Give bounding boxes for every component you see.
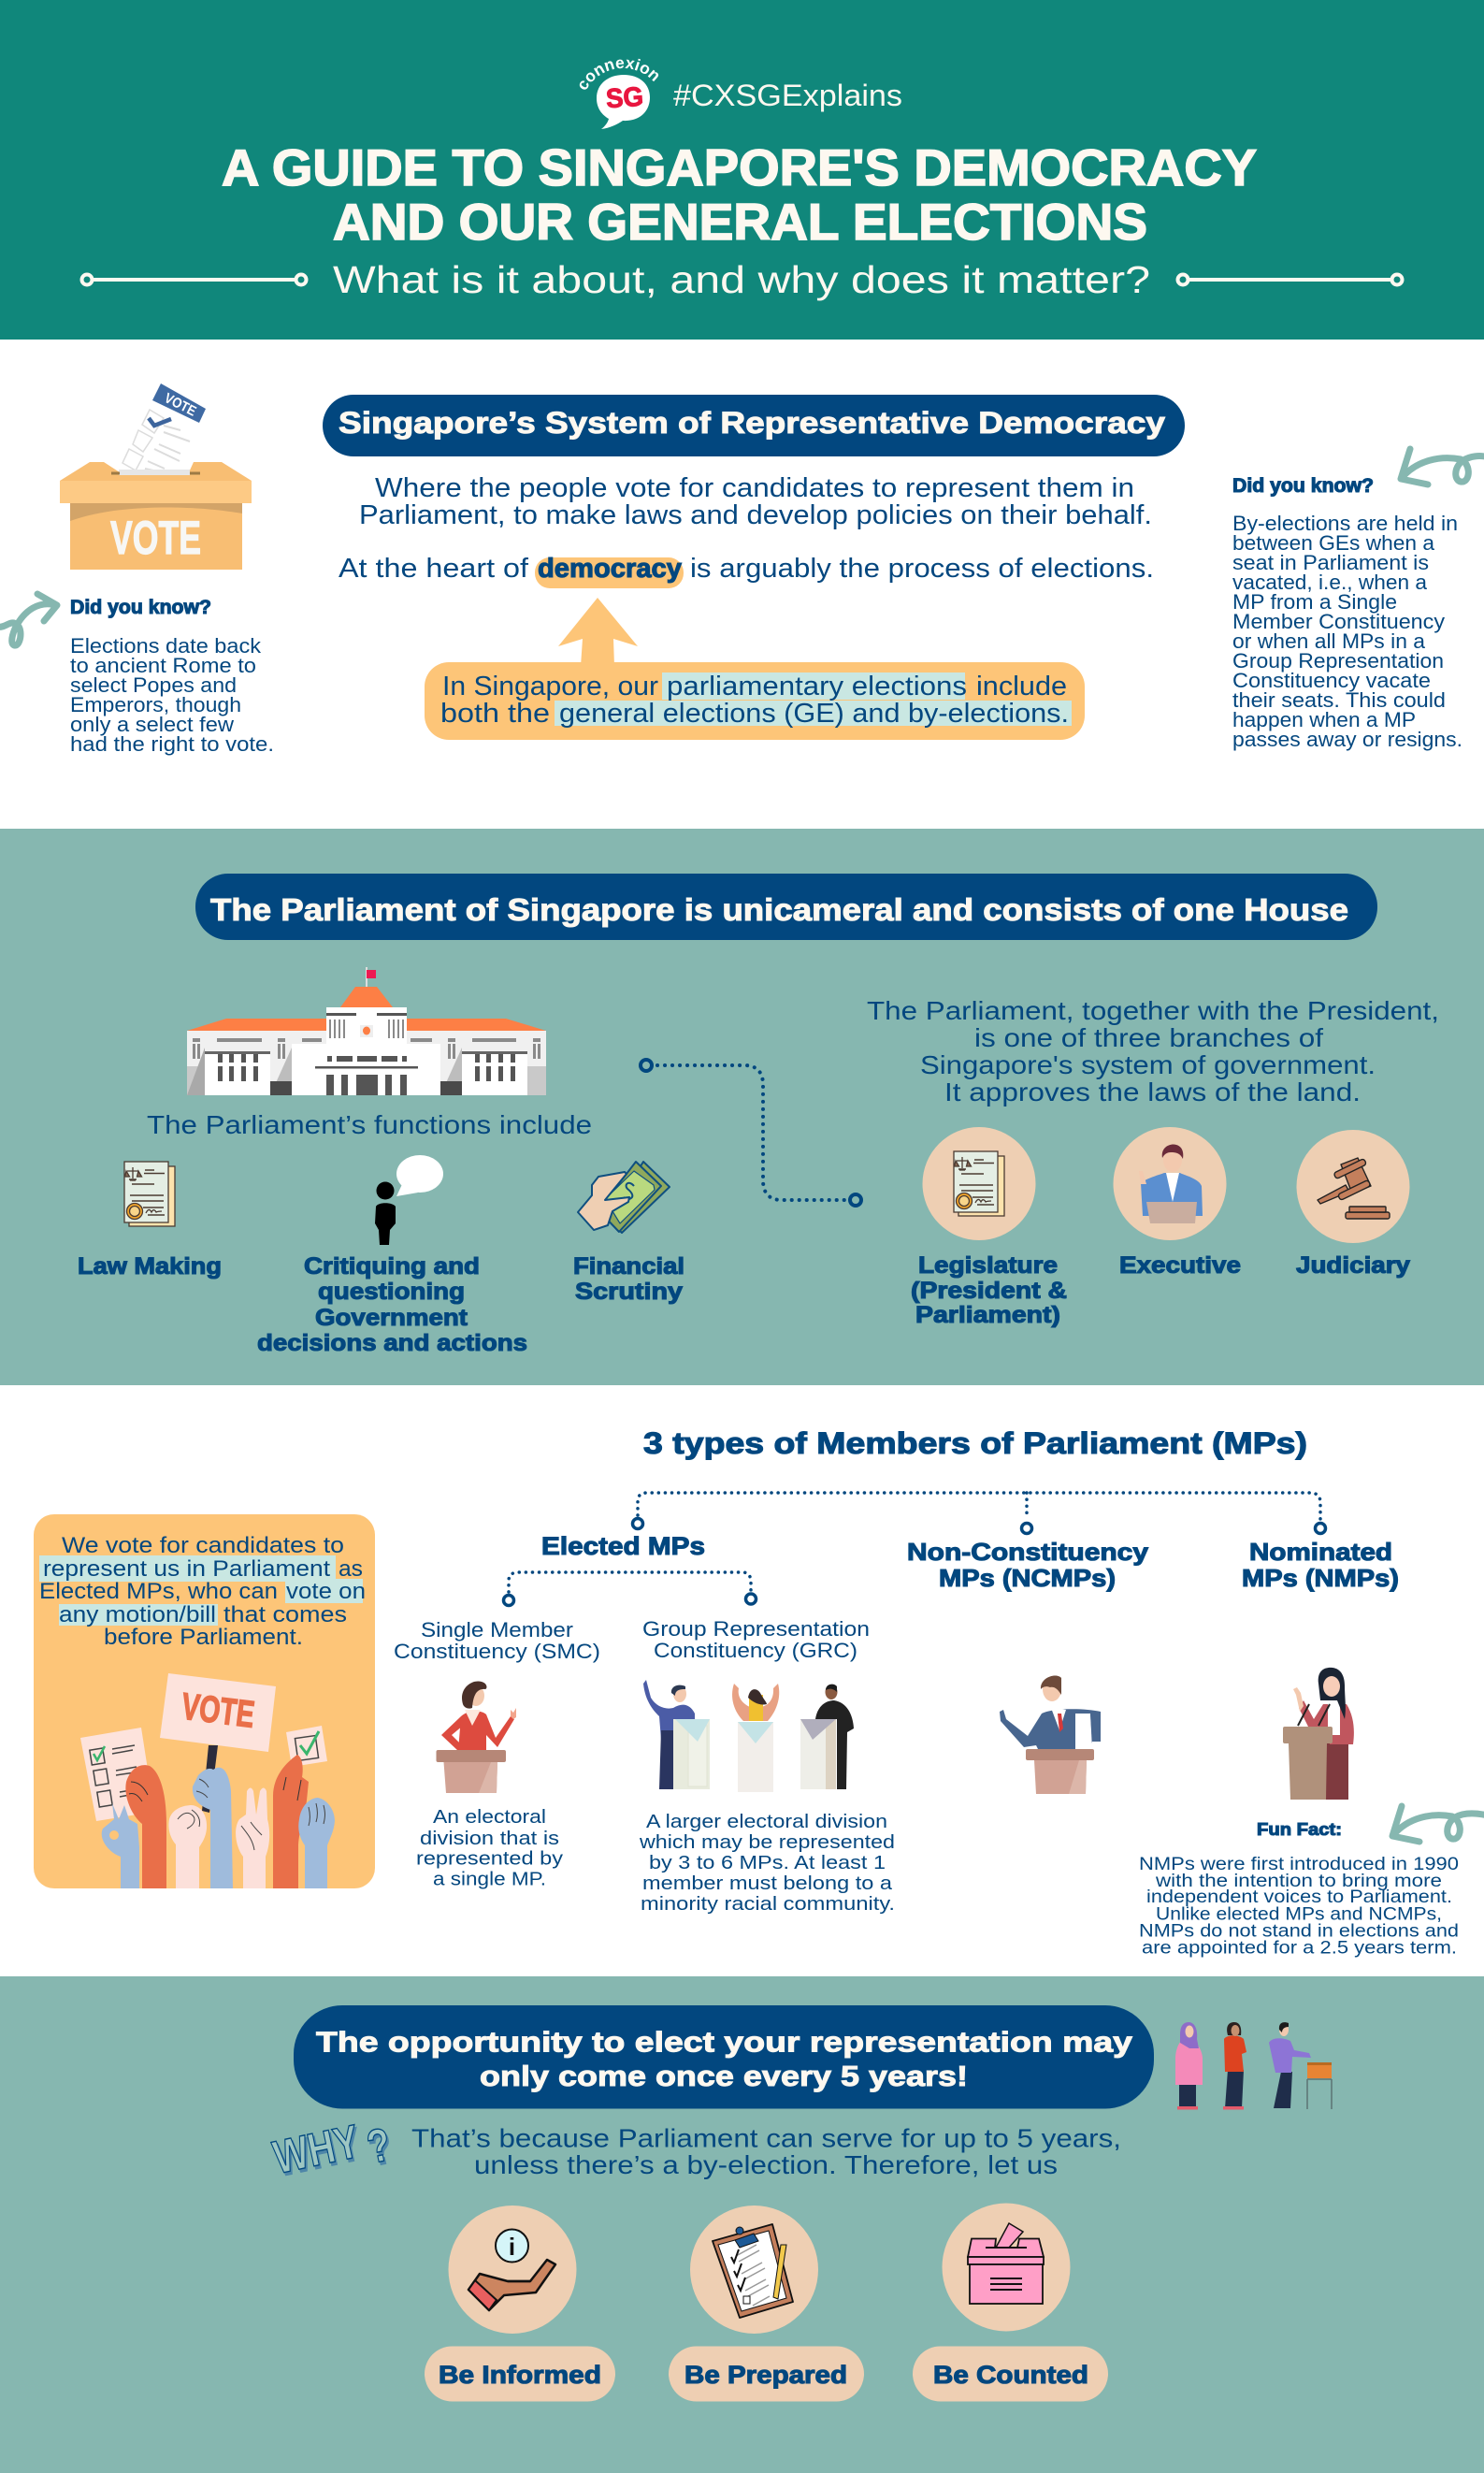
text block: GRC description: by 3 to 6 MPs. At least 1 xyxy=(649,1852,886,1873)
label: critiquing: Government xyxy=(315,1305,468,1331)
label: SMC xyxy=(394,1618,600,1663)
text block: did you know right: seat in Parliament is xyxy=(1232,551,1429,574)
label: legislature: Parliament) xyxy=(915,1302,1060,1328)
text block: fun fact: are appointed for a 2.5 years term. xyxy=(1142,1938,1457,1959)
label: financial scrutiny xyxy=(573,1253,684,1305)
text block: card text: vote on xyxy=(286,1579,366,1604)
heading: 3 types: 3 types of Members of Parliament (MPs) xyxy=(643,1426,1307,1460)
text block: GRC description: member must belong to a xyxy=(642,1873,893,1894)
icon: ballot box xyxy=(60,383,252,570)
text block: fun fact xyxy=(1139,1819,1459,1959)
hashtag: #CXSGExplains xyxy=(673,79,902,112)
icon: ballot box: VOTE xyxy=(162,390,199,420)
text block: did you know left: Emperors, though xyxy=(70,693,241,716)
label: NMPs: Nominated xyxy=(1249,1538,1392,1566)
text block: card text: that comes xyxy=(223,1602,347,1627)
illustration: GRC speakers xyxy=(643,1680,854,1792)
text block: did you know left: Did you know? xyxy=(70,597,211,618)
label: legislature xyxy=(911,1252,1067,1328)
arrow: dotted connector xyxy=(641,1060,861,1206)
text block: SMC description: division that is xyxy=(420,1828,559,1849)
arrow: squiggle left xyxy=(0,594,57,645)
text block: did you know right: or when all MPs in a xyxy=(1232,629,1426,653)
label: GRC: Constituency (GRC) xyxy=(654,1639,857,1662)
illustration: hands voting xyxy=(80,1673,335,1888)
icon: be prepared xyxy=(690,2205,818,2334)
text block: definition: Where the people vote for candidates to represent them in xyxy=(375,473,1134,503)
text: functions intro: The Parliament’s functions include xyxy=(147,1110,592,1139)
text block: branches of government: is one of three branches of xyxy=(974,1023,1323,1052)
card: we vote for candidates xyxy=(34,1514,375,1888)
panel: call to action xyxy=(0,1976,1484,2473)
title: AND OUR GENERAL ELECTIONS xyxy=(333,193,1147,251)
text block: card text: before Parliament. xyxy=(104,1625,303,1650)
text block: branches of government: Singapore's system of government. xyxy=(920,1050,1376,1079)
icon: be informed xyxy=(449,2205,576,2334)
button: be prepared: Be Prepared xyxy=(684,2361,847,2389)
illustration: voters queue xyxy=(1175,2022,1332,2110)
text block: card text: any motion/bill xyxy=(59,1602,216,1627)
label: judiciary: Judiciary xyxy=(1296,1252,1410,1279)
text block: card text: represent us in Parliament xyxy=(43,1556,330,1582)
text block: did you know right: Constituency vacate xyxy=(1232,669,1431,692)
label: GRC xyxy=(642,1617,870,1662)
label: NCMPs: MPs (NCMPs) xyxy=(939,1564,1116,1592)
subtitle rule left xyxy=(82,275,307,284)
text block: card text xyxy=(39,1533,366,1650)
panel: representative democracy xyxy=(0,340,1484,829)
text block: fun fact: NMPs were first introduced in 1990 xyxy=(1139,1854,1459,1874)
icon: be informed: i xyxy=(509,2233,515,2261)
icon: WHY? lettering: ? xyxy=(363,2118,396,2174)
icon: money in hand xyxy=(578,1162,670,1233)
text block: did you know right: MP from a Single xyxy=(1232,590,1397,614)
icon: ballot box: VOTE xyxy=(110,512,201,564)
logo: connexion SG speech bubble: SG xyxy=(605,82,644,114)
text block: branches of government: It approves the laws of the land. xyxy=(944,1077,1361,1106)
text block: why explanation: That’s because Parliament can serve for up to 5 years, xyxy=(411,2123,1121,2153)
text block: did you know left: only a select few xyxy=(70,713,234,736)
icon: be counted xyxy=(943,2204,1070,2331)
arrow: dotted tree elected xyxy=(503,1572,756,1605)
text block: GRC description: A larger electoral division xyxy=(646,1811,887,1832)
text block: heart of democracy xyxy=(339,554,1154,588)
text block: did you know right: By-elections are held in xyxy=(1232,512,1458,535)
label: SMC: Single Member xyxy=(421,1618,574,1641)
callout: parliamentary elections: parliamentary elections xyxy=(667,672,967,701)
button: be informed xyxy=(425,2346,615,2402)
text block: did you know right: Member Constituency xyxy=(1232,610,1445,633)
label: NCMPs xyxy=(907,1538,1149,1592)
label: NCMPs: Non-Constituency xyxy=(907,1538,1149,1566)
icon: law document xyxy=(124,1162,175,1226)
text block: fun fact: independent voices to Parliament. xyxy=(1146,1887,1452,1907)
label: executive: Executive xyxy=(1119,1252,1241,1279)
heading pill xyxy=(323,395,1185,456)
text block: GRC description: minority racial community. xyxy=(641,1893,895,1915)
heading pill xyxy=(294,2005,1154,2108)
text block: did you know right: between GEs when a xyxy=(1232,531,1435,555)
subtitle rule right xyxy=(1178,275,1403,284)
text block: did you know right: happen when a MP xyxy=(1232,708,1416,731)
text block: did you know left: select Popes and xyxy=(70,673,237,697)
logo: connexion SG speech bubble xyxy=(580,58,658,129)
text block: definition xyxy=(359,473,1152,530)
text block: fun fact: NMPs do not stand in elections and xyxy=(1139,1921,1459,1942)
text block: did you know right xyxy=(1232,475,1462,751)
logo: connexion SG speech bubble: connexion xyxy=(580,58,658,90)
label: critiquing: decisions and actions xyxy=(257,1330,527,1356)
label: NMPs xyxy=(1242,1538,1399,1592)
button: be counted: Be Counted xyxy=(933,2361,1088,2389)
heading pill: The opportunity to elect your representation may xyxy=(316,2026,1133,2058)
illustration: hands voting: VOTE xyxy=(180,1686,257,1736)
label: legislature: Legislature xyxy=(918,1252,1058,1279)
text block: SMC description: An electoral xyxy=(433,1806,546,1828)
text block: did you know right: passes away or resigns. xyxy=(1232,728,1462,751)
button: be counted xyxy=(913,2346,1108,2402)
heading pill: Singapore’s System of Representative Democracy xyxy=(339,406,1165,440)
button: be informed: Be Informed xyxy=(439,2361,601,2389)
text block: did you know left: Elections date back xyxy=(70,634,262,658)
callout: parliamentary elections: both the xyxy=(440,699,550,729)
icon: executive xyxy=(1113,1127,1227,1240)
text block: did you know right: vacated, i.e., when a xyxy=(1232,571,1428,594)
text block: why explanation xyxy=(411,2123,1121,2179)
text block: card text: as xyxy=(339,1556,363,1582)
text block: card text: We vote for candidates to xyxy=(62,1533,344,1558)
icon: WHY? lettering: WHY xyxy=(268,2115,364,2184)
text block: branches of government: The Parliament, together with the President, xyxy=(867,996,1439,1025)
icon: person speaking xyxy=(375,1155,443,1245)
text block: fun fact: with the intention to bring more xyxy=(1155,1871,1442,1891)
label: law making: Law Making xyxy=(78,1253,222,1280)
callout: parliamentary elections xyxy=(425,662,1085,740)
illustration: NCMP speaker xyxy=(1000,1675,1101,1794)
text block: heart of democracy: is arguably the process of elections. xyxy=(690,554,1154,584)
text block: card text: Elected MPs, who can xyxy=(39,1579,278,1604)
text block: SMC description: a single MP. xyxy=(433,1869,546,1889)
icon: legislature xyxy=(922,1127,1036,1240)
text block: did you know left: had the right to vote. xyxy=(70,732,274,756)
text block: SMC description: represented by xyxy=(416,1848,564,1869)
arrow: squiggle right xyxy=(1401,449,1484,484)
text block: fun fact: Fun Fact: xyxy=(1257,1819,1342,1839)
title: A GUIDE TO SINGAPORE'S DEMOCRACY xyxy=(222,138,1257,196)
arrow: squiggle fun fact xyxy=(1392,1806,1484,1842)
heading pill: The Parliament of Singapore is unicameral and consists of one House xyxy=(210,892,1348,927)
icon: judiciary gavel xyxy=(1296,1130,1410,1243)
label: critiquing: questioning xyxy=(318,1279,465,1305)
panel: types of MPs xyxy=(0,1385,1484,1976)
text block: did you know right: Group Representation xyxy=(1232,649,1444,672)
illustration: NMP speaker xyxy=(1283,1668,1354,1800)
text block: fun fact: Unlike elected MPs and NCMPs, xyxy=(1156,1904,1442,1925)
subtitle: What is it about, and why does it matter? xyxy=(333,258,1150,301)
text block: heart of democracy: democracy xyxy=(538,554,682,584)
text block: did you know left xyxy=(70,597,274,756)
text block: GRC description xyxy=(639,1811,895,1915)
text block: did you know left: to ancient Rome to xyxy=(70,654,256,677)
callout: parliamentary elections: include xyxy=(976,672,1067,701)
text block: GRC description: which may be represented xyxy=(639,1831,895,1853)
text block: did you know right: Did you know? xyxy=(1232,475,1374,497)
title xyxy=(222,138,1257,251)
heading pill: only come once every 5 years! xyxy=(480,2060,968,2092)
arrow: up xyxy=(558,598,638,666)
label: NMPs: MPs (NMPs) xyxy=(1242,1564,1399,1592)
text block: branches of government xyxy=(867,996,1439,1106)
callout: parliamentary elections: In Singapore, our xyxy=(442,672,658,701)
text block: why explanation: unless there’s a by-election. Therefore, let us xyxy=(474,2150,1058,2179)
label: GRC: Group Representation xyxy=(642,1617,870,1641)
arrow: dotted tree top xyxy=(632,1493,1326,1534)
label: financial scrutiny: Scrutiny xyxy=(575,1279,683,1305)
panel: header xyxy=(0,0,1484,340)
label: financial scrutiny: Financial xyxy=(573,1253,684,1280)
text block: SMC description xyxy=(416,1806,564,1889)
label: critiquing xyxy=(257,1253,527,1356)
label: critiquing: Critiquing and xyxy=(304,1253,480,1280)
text block: heart of democracy: At the heart of xyxy=(339,554,529,584)
icon: parliament building xyxy=(187,967,546,1095)
text block: definition: Parliament, to make laws and develop policies on their behalf. xyxy=(359,500,1152,530)
label: legislature: (President & xyxy=(911,1278,1067,1304)
text block: did you know right: their seats. This could xyxy=(1232,688,1446,712)
label: SMC: Constituency (SMC) xyxy=(394,1640,600,1663)
heading pill xyxy=(195,874,1377,940)
illustration: SMC speaker xyxy=(436,1681,516,1793)
panel: parliament of singapore xyxy=(0,829,1484,1385)
label: elected MPs: Elected MPs xyxy=(541,1532,705,1560)
callout: parliamentary elections: general elections (GE) and by-elections. xyxy=(559,699,1069,729)
button: be prepared xyxy=(669,2346,864,2402)
